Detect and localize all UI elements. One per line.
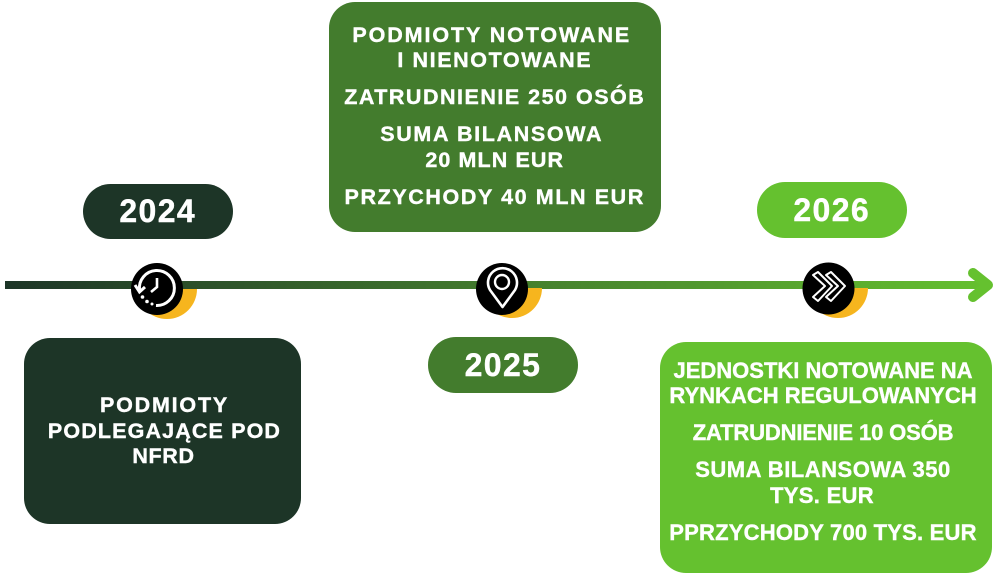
text: regulated markets line 2: RYNKACH REGULOWANYCH bbox=[669, 383, 977, 408]
text: balance sheet line 1: SUMA BILANSOWA bbox=[380, 122, 603, 146]
text: 2024 scope line 3: NFRD bbox=[132, 444, 195, 468]
icon: double chevron bbox=[802, 262, 868, 318]
panel: 2025 scope bbox=[329, 2, 660, 232]
text: revenue 700: PPRZYCHODY 700 TYS. EUR bbox=[669, 520, 977, 545]
year badge 2026 bbox=[757, 182, 906, 238]
icon: map pin bbox=[476, 263, 542, 318]
text: employment 250: ZATRUDNIENIE 250 OSÓB bbox=[344, 85, 645, 109]
text: listed and unlisted line 1: PODMIOTY NOTOWANE bbox=[352, 23, 631, 47]
icon: history clock bbox=[131, 263, 197, 319]
text: employment 10: ZATRUDNIENIE 10 OSÓB bbox=[693, 420, 953, 445]
year badge 2024 bbox=[83, 184, 232, 239]
text: revenue 40 mln: PRZYCHODY 40 MLN EUR bbox=[345, 185, 645, 209]
panel: 2026 scope bbox=[660, 342, 992, 573]
year badge 2025 bbox=[428, 337, 578, 393]
year badge 2025: 2025 bbox=[465, 347, 541, 383]
timeline arrow bbox=[5, 273, 988, 297]
text: listed and unlisted line 2: I NIENOTOWANE bbox=[397, 48, 592, 72]
year badge 2026: 2026 bbox=[793, 192, 870, 228]
text: balance sheet 350 line 1: SUMA BILANSOWA 350 bbox=[695, 457, 951, 482]
panel: 2024 scope bbox=[24, 338, 301, 524]
text: 2024 scope line 1: PODMIOTY bbox=[100, 393, 229, 417]
text: balance sheet 350 line 2: TYS. EUR bbox=[770, 483, 874, 508]
text: 2024 scope line 2: PODLEGAJĄCE POD bbox=[48, 419, 281, 443]
text: regulated markets line 1: JEDNOSTKI NOTOWANE NA bbox=[673, 358, 973, 383]
year badge 2024: 2024 bbox=[119, 193, 196, 229]
text: balance sheet line 2: 20 MLN EUR bbox=[425, 148, 564, 172]
